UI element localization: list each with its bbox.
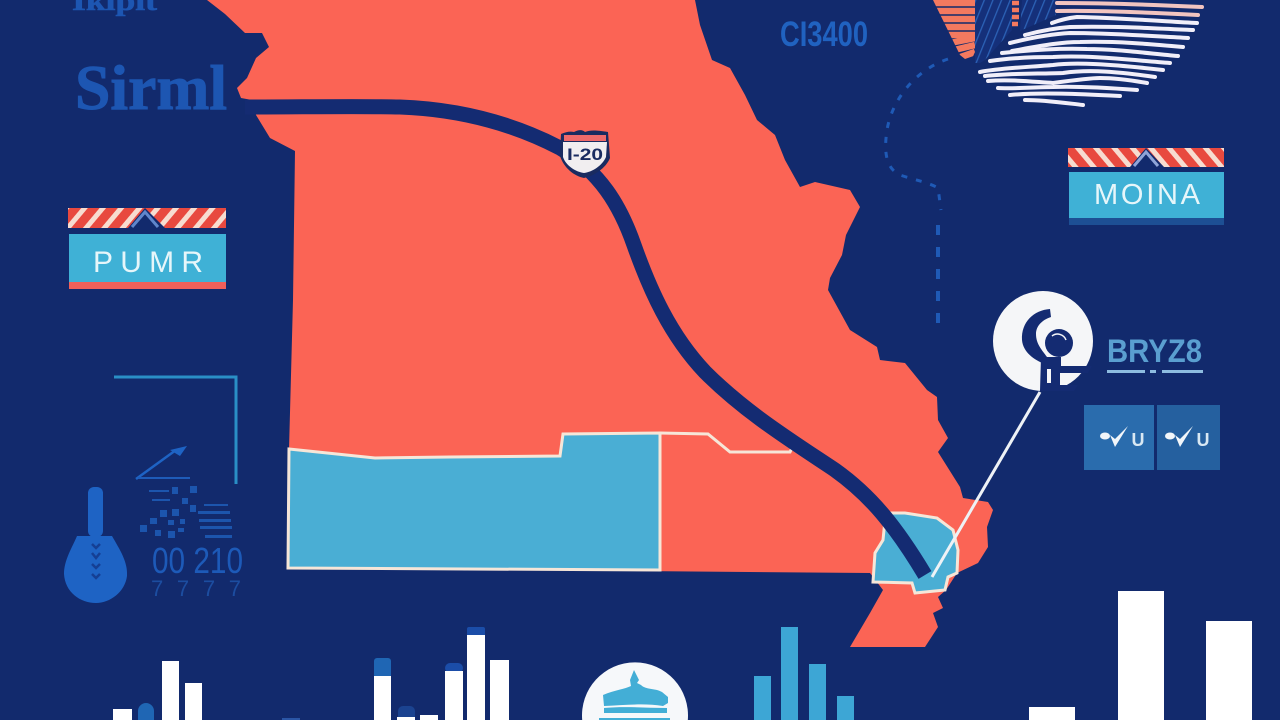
- corner bracket: [114, 377, 236, 484]
- state map: [207, 0, 1040, 647]
- small red sliver: [1012, 3, 1019, 24]
- check tile one: U: [1132, 430, 1144, 450]
- highway shield: [560, 130, 610, 178]
- cyan label plate left: [69, 234, 226, 282]
- bar chart right: [1029, 591, 1252, 720]
- shield number: I-20: [567, 145, 603, 164]
- bar chart left: [113, 661, 300, 720]
- panel number: 00 210: [152, 540, 243, 581]
- heading left: Sirml: [75, 52, 227, 123]
- blue south-east region: [873, 513, 958, 593]
- callout disc: [993, 291, 1093, 391]
- check tile two: U: [1196, 430, 1210, 450]
- cyan label plate right: [1069, 172, 1224, 218]
- label right: MOINA: [1094, 179, 1201, 211]
- small line list: [198, 504, 232, 538]
- red sliced sector: [930, 3, 975, 59]
- chevron right: [1130, 148, 1164, 167]
- border line east of blue region: [660, 433, 795, 452]
- callout leader line: [932, 392, 1040, 577]
- panel ticks: 7777: [151, 576, 241, 601]
- stripe band left: [68, 208, 226, 228]
- icon: capitol dome: [603, 670, 668, 706]
- highway route: [245, 107, 925, 575]
- stripe band right: [1068, 148, 1224, 167]
- emblem base: [599, 718, 670, 720]
- icon: arrow: [136, 446, 190, 479]
- white wavy stripes: [980, 3, 1202, 105]
- scatter of marks: [140, 486, 197, 538]
- callout underline: [1107, 370, 1203, 373]
- blue south-west region: [288, 433, 660, 570]
- emblem disc: [582, 662, 688, 720]
- bar chart centre: [374, 627, 509, 720]
- callout right: [993, 291, 1220, 470]
- red strip left: [69, 282, 226, 289]
- pie disc: [930, 0, 1202, 105]
- top right number: CI3400: [780, 15, 868, 54]
- map base in coral: [207, 0, 993, 647]
- chevron left: [128, 208, 165, 228]
- check tile two: [1157, 405, 1220, 470]
- dark strip right: [1069, 218, 1224, 225]
- dashed connector: [886, 59, 948, 332]
- hatched sectors: [975, 0, 1056, 63]
- label banner left: [68, 208, 226, 289]
- label banner right: [1068, 148, 1224, 225]
- bar chart cyan: [754, 627, 854, 720]
- icon: pin tool: [1022, 309, 1092, 391]
- label left: PUMR: [93, 246, 203, 279]
- left info panel: [64, 377, 243, 603]
- check tile one: [1084, 405, 1154, 470]
- emblem plinth: [604, 707, 667, 713]
- callout title: BRYZ8: [1107, 333, 1202, 369]
- icon: bulb tool: [64, 487, 127, 603]
